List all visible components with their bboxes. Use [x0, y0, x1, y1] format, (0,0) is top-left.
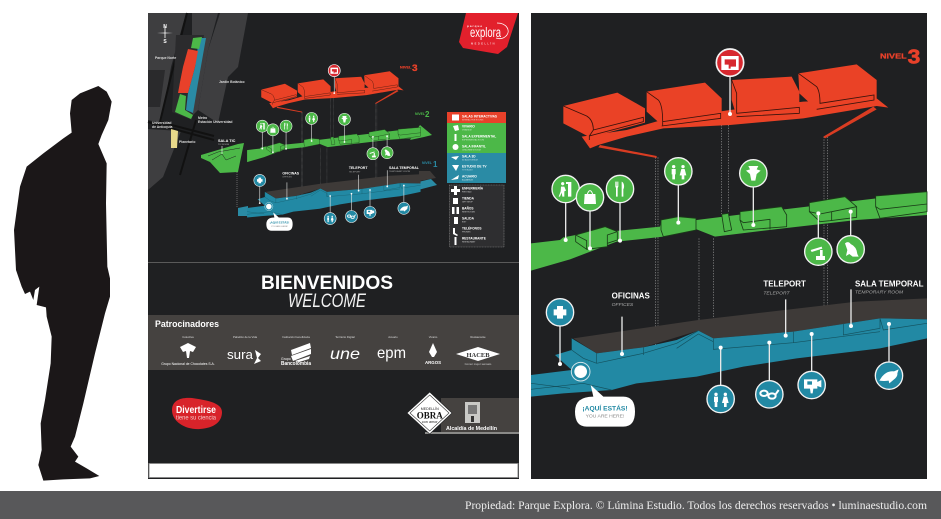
legend: RESTAURANT: [462, 240, 476, 244]
medellin diamond: OBRA: [417, 410, 443, 420]
sponsor captions: Vivario: [429, 335, 438, 339]
label: oficinas: [612, 291, 650, 308]
level 3 label: [880, 45, 920, 68]
icon: aquarium: [875, 362, 903, 389]
medellin diamond: [407, 392, 452, 434]
legend: AQUARIUM: [462, 178, 473, 182]
compass: N: [163, 24, 167, 30]
legend labels: SALA 3D: [462, 154, 476, 158]
legend labels: SALAS INTERACTIVAS: [462, 114, 497, 118]
label: sala temporal: [855, 280, 924, 296]
level 3: red floor: [563, 64, 888, 158]
level 3 label: NIVEL: [880, 51, 907, 60]
footer bar: [0, 491, 941, 519]
level labels on small map: 1: [433, 160, 438, 169]
legend: VIVARIUM: [462, 128, 472, 132]
sponsor: sura: sura: [227, 347, 254, 362]
legend labels: ESTUDIO DE TV: [462, 164, 487, 168]
level labels on small map: NIVEL: [415, 112, 425, 116]
icon: tv camera: [798, 371, 825, 399]
callout: you are here: YOU ARE HERE!: [586, 414, 624, 420]
sala tic label: SALA TIC: [218, 139, 236, 143]
legend: EXIT: [462, 222, 467, 224]
sponsor: bancolombia: [281, 343, 312, 367]
icon: restaurant: [606, 175, 634, 203]
panel: alcaldia de medellin: [407, 392, 519, 434]
icon: first aid: [546, 299, 574, 326]
level 3 label: 3: [908, 45, 920, 68]
sponsor: une: une: [330, 346, 360, 363]
logo: divertirse: [172, 398, 222, 429]
small map extensions: [201, 125, 437, 216]
icon: 3d glasses: [756, 381, 783, 408]
legend labels: ENFERMERÍA: [462, 186, 484, 190]
logo: divertirse: tiene su ciencia: [176, 416, 217, 422]
icon: exit: [552, 175, 579, 203]
legend labels: [462, 114, 497, 240]
callout: you are here: ¡AQUÍ ESTÁS!: [582, 404, 628, 413]
panel: lobby sign: [148, 13, 519, 479]
sponsor: haceb: [456, 347, 500, 366]
red buildings: [563, 64, 877, 137]
legend labels: SALA EXPERIMENTAL: [462, 134, 496, 138]
sala tic label: [218, 139, 236, 154]
logo: parque explora: MEDELLÍN: [471, 42, 496, 46]
logo: parque explora: [459, 13, 518, 54]
legend: [447, 112, 506, 247]
legend labels: TELÉFONOS: [462, 226, 481, 230]
medellin diamond: con amor: [422, 420, 438, 424]
sponsor: bancolombia: Grupo: [281, 357, 291, 361]
city shield: [465, 402, 480, 423]
map labels: [152, 56, 245, 144]
sponsor captions: [182, 335, 486, 339]
sala tic label: TIC ROOM: [218, 144, 229, 146]
sponsor captions: Restaurante: [470, 335, 486, 339]
sponsor captions: Pabellón de la Vida: [233, 335, 257, 339]
map labels: Metro: [198, 116, 207, 120]
sponsor captions: Colectiva: [182, 335, 194, 339]
callout: you are here: [575, 385, 635, 427]
site map: [148, 13, 248, 190]
sponsor captions: Territorio Digital: [335, 335, 355, 339]
legend: FIRST AID: [462, 190, 472, 194]
icon: interactive rooms: [716, 49, 744, 76]
label: sala temporal: SALA TEMPORAL: [855, 280, 924, 289]
you are here marker: [571, 362, 590, 381]
icon: vivarium: [740, 160, 767, 187]
legend labels: RESTAURANTE: [462, 236, 486, 240]
legend labels: SALA INFANTIL: [462, 144, 486, 148]
logo: parque explora: parque: [467, 24, 483, 28]
icon: restrooms teal: [707, 385, 734, 413]
sponsor: haceb: HACEB: [466, 352, 490, 359]
stems: [558, 63, 891, 399]
logo: divertirse: Divertirse: [176, 405, 216, 416]
compass: S: [163, 39, 167, 45]
map labels: de Antioquia: [152, 125, 173, 129]
legend labels: SALIDA: [462, 216, 475, 220]
legend: PHONES: [462, 232, 471, 234]
map labels: Jardín Botánico: [219, 80, 245, 84]
compass: [157, 24, 173, 45]
panel: detailed floor plan: [531, 13, 927, 479]
map labels: Estación Universidad: [198, 120, 232, 124]
icon: children room: [837, 236, 864, 263]
icon: shop: [576, 184, 604, 211]
label: sala temporal: TEMPORARY ROOM: [855, 290, 904, 296]
logo: parque explora: explora: [470, 25, 501, 40]
sponsor: nacional de chocolates: [161, 343, 215, 366]
panel: sponsors: Patrocinadores: [155, 319, 219, 330]
panel: sponsors: [148, 315, 519, 370]
label: teleport: TELEPORT: [763, 280, 806, 289]
legend: TV STUDIO: [462, 170, 473, 172]
icon: restrooms green: [665, 158, 692, 185]
sponsor captions: Institución beneficiaria: [282, 335, 310, 339]
legend: 3D AUDITORIUM: [462, 158, 478, 162]
sponsor: haceb: Comer mejor sensato: [465, 362, 492, 366]
heading: bienvenidos: BIENVENIDOS: [261, 272, 393, 294]
medellin diamond: MEDELLÍN: [421, 407, 439, 411]
sponsor: argos: ARGOS: [425, 360, 441, 365]
map labels: Universidad: [152, 121, 171, 125]
green buildings: [576, 192, 927, 249]
legend: INTERACTIVE ROOMS: [462, 118, 484, 122]
label: oficinas: OFFICES: [612, 302, 634, 308]
panel: alcaldia de medellin: Alcaldía de Medellín: [446, 426, 497, 432]
label: teleport: [763, 280, 806, 296]
footer bar: Propiedad: Parque Explora. © Lúmina Estudio. Todos los derechos reservados • luminaestudio.com: [465, 500, 927, 512]
dashed connectors: [655, 125, 827, 367]
sponsor: bancolombia: Bancolombia: [281, 361, 312, 367]
level labels on small map: 2: [425, 110, 430, 119]
map: building footprint: [171, 37, 206, 148]
map labels: Parque Norte: [155, 56, 176, 60]
legend labels: ACUARIO: [462, 174, 477, 178]
legend labels: BAÑOS: [462, 206, 474, 210]
legend labels: VIVARIO: [462, 124, 475, 128]
sponsor captions: Acuario: [388, 335, 398, 339]
white bottom strip: [149, 464, 518, 478]
human silhouette: [14, 86, 112, 481]
label: oficinas: OFICINAS: [612, 291, 650, 300]
level labels on small map: NIVEL: [422, 161, 432, 165]
sponsor: nacional de chocolates: Grupo Nacional de Chocolates S.A.: [161, 362, 215, 366]
legend: EXPERIMENTAL ROOM: [462, 138, 484, 142]
sponsor: sura: [227, 347, 261, 364]
icon: experimental room: [805, 238, 832, 265]
sponsor: argos: [425, 343, 441, 365]
heading: welcome: WELCOME: [288, 290, 367, 312]
small floor plan: [247, 63, 421, 231]
legend: RESTROOMS: [462, 212, 476, 214]
legend: GIFT SHOP: [462, 202, 473, 204]
level 1: offices and teal floor: [531, 298, 927, 397]
legend labels: TIENDA: [462, 196, 475, 200]
detailed floor plan: [531, 45, 927, 427]
sponsor: epm: epm: [377, 345, 406, 362]
level 2: green floor: [531, 192, 927, 271]
level labels on small map: [415, 110, 438, 169]
legend: CHILDREN'S ROOM: [462, 150, 481, 152]
legend icons: [451, 114, 460, 245]
map labels: Planetario: [179, 140, 195, 144]
label: teleport: TELEPORT: [763, 290, 791, 296]
